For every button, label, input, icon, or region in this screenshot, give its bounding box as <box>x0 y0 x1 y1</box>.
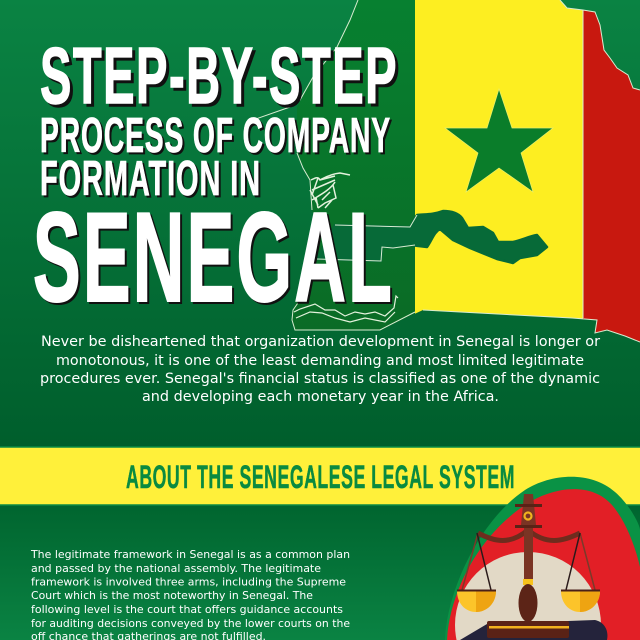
legal system paragraph: for auditing decisions conveyed by the lower courts on the <box>31 617 350 630</box>
map: Gambia border lines <box>317 215 417 261</box>
icon: front suspension cords <box>477 533 580 590</box>
map: country outline <box>253 0 640 342</box>
icon: beige circle <box>455 552 601 640</box>
legal system paragraph: Court which is the most noteworthy in Senegal. The <box>31 589 313 602</box>
title line: PROCESS OF COMPANY <box>40 109 393 165</box>
background: upper green gradient <box>0 0 640 448</box>
intro paragraph: and developing each monetary year in the Africa. <box>142 389 499 405</box>
title line: PROCESS OF COMPANY: PROCESS OF COMPANY <box>42 111 393 165</box>
yellow heading band <box>0 447 640 505</box>
title line: FORMATION IN <box>40 152 263 208</box>
legal system paragraph: following level is the court that offers guidance accounts <box>31 603 343 616</box>
legal system paragraph: and passed by the national assembly. The legitimate <box>31 562 321 575</box>
title line: STEP-BY-STEP: STEP-BY-STEP <box>43 34 401 123</box>
title line: SENEGAL <box>33 186 396 330</box>
legal system paragraph: The legitimate framework in Senegal is as a common plan <box>30 548 350 561</box>
icon: central column <box>487 494 569 638</box>
icon: green arch <box>445 477 640 640</box>
legal system paragraph <box>30 548 350 640</box>
map of Senegal in flag colours <box>253 0 640 345</box>
icon: scales of justice <box>445 477 640 640</box>
icon: red arch <box>447 489 640 640</box>
icon: left pan <box>457 590 496 612</box>
icon: beam arms <box>478 530 580 540</box>
map: Casamance river <box>294 296 398 322</box>
map: yellow flag stripe <box>415 0 583 345</box>
intro paragraph: procedures ever. Senegal's financial status is classified as one of the dynamic <box>40 371 600 387</box>
intro paragraph: monotonous, it is one of the least demanding and most limited legitimate <box>56 353 584 369</box>
title line: STEP-BY-STEP <box>40 31 401 123</box>
icon: dark base <box>460 620 607 640</box>
icon: back suspension cords <box>462 533 595 590</box>
title line: FORMATION IN: FORMATION IN <box>42 154 263 208</box>
map: red flag stripe <box>583 0 640 345</box>
title line: PROCESS OF COMPANY: PROCESS OF COMPANY <box>40 109 391 163</box>
lower section background <box>0 504 640 640</box>
intro paragraph <box>40 334 600 405</box>
intro paragraph: Never be disheartened that organization development in Senegal is longer or <box>41 334 600 350</box>
map: Saloum delta islands <box>310 173 350 208</box>
map: green flag stripe <box>290 0 415 345</box>
map: green star <box>445 89 553 192</box>
legal system paragraph: framework is involved three arms, including the Supreme <box>31 576 346 588</box>
title line: STEP-BY-STEP: STEP-BY-STEP <box>40 31 398 120</box>
title <box>33 31 401 330</box>
map: Gambia strip <box>317 211 547 263</box>
icon: right pan <box>561 590 600 612</box>
title line: FORMATION IN: FORMATION IN <box>40 152 261 206</box>
